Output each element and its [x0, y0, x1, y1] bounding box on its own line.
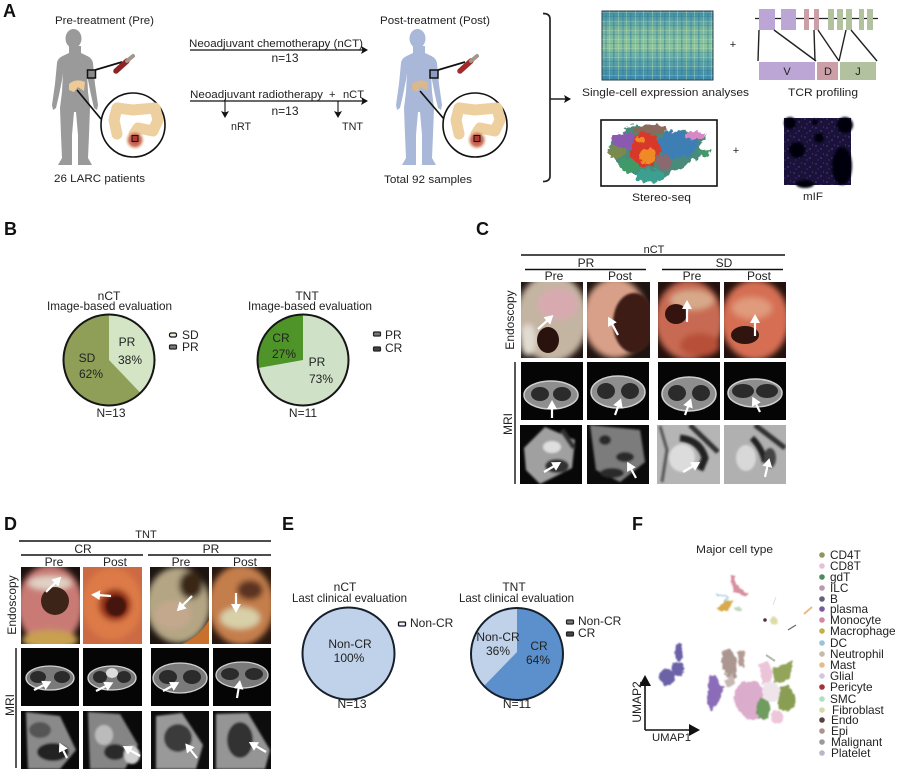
pie chart: TNT image-based evaluation: 73%	[309, 372, 333, 386]
photo: endoscopy SD Pre	[658, 282, 720, 358]
panel letter E: E	[282, 514, 294, 534]
label: total 92 samples: Total 92 samples	[384, 174, 473, 186]
column headers: TNT CR PR Pre Post: Pre	[172, 555, 191, 569]
legend: cell types: ILC	[830, 581, 849, 595]
panel letter A: A	[3, 1, 16, 21]
pie chart: TNT image-based evaluation: N=11	[289, 406, 317, 420]
pie chart: TNT last clinical evaluation: Non-CR	[476, 630, 520, 644]
pie chart: nCT image-based evaluation: nCT	[98, 289, 121, 303]
arrow: neoadjuvant radiotherapy plus nCT with nRT and TNT branches: Neoadjuvant radiotherapy	[190, 89, 324, 101]
icon: blue human body with colon, biopsy and blood tube	[396, 29, 507, 165]
map: stereo-seq spatial clusters	[601, 120, 717, 186]
legend: cell types: gdT	[830, 570, 850, 584]
arrow: neoadjuvant chemotherapy: Neoadjuvant chemotherapy (nCT)	[189, 38, 363, 50]
plus sign: +	[733, 145, 739, 157]
pie chart: TNT last clinical evaluation: CR	[530, 639, 548, 653]
pie chart: nCT last clinical evaluation: 100%	[334, 651, 365, 665]
pie chart: TNT last clinical evaluation: 36%	[486, 644, 510, 658]
pie chart: nCT image-based evaluation	[47, 289, 172, 420]
label: single-cell expression analyses: Single-cell expression analyses	[582, 87, 750, 99]
photo: endoscopy PR Pre	[521, 282, 583, 358]
panel C: nCT imaging	[476, 219, 789, 484]
bracket with arrow to analyses	[543, 14, 570, 182]
pie chart: nCT last clinical evaluation: N=13	[337, 697, 367, 711]
UMAP axes: UMAP1	[652, 732, 691, 744]
photo: endoscopy PR Pre	[146, 567, 210, 644]
legend: Non-CR and CR: Non-CR	[578, 614, 622, 628]
diagram: TCR V D J segments: D	[824, 66, 832, 78]
legend: PR and CR: CR	[385, 341, 403, 355]
column headers: nCT PR SD Pre Post: Post	[747, 269, 772, 283]
legend: SD and PR: SD	[182, 328, 199, 342]
heading: pre-treatment: Pre-treatment (Pre)	[55, 15, 154, 27]
legend: cell types: Endo	[831, 713, 859, 727]
panel letter C: C	[476, 219, 489, 239]
legend: cell types: Neutrophil	[830, 647, 884, 661]
column headers: nCT PR SD Pre Post: SD	[716, 256, 733, 270]
image: multiplex immunofluorescence	[784, 117, 853, 188]
pie chart: TNT last clinical evaluation: N=11	[503, 697, 531, 711]
arrow: neoadjuvant radiotherapy plus nCT with nRT and TNT branches: nRT	[231, 121, 251, 133]
pie chart: TNT last clinical evaluation: 64%	[526, 653, 550, 667]
diagram: TCR V D J segments: J	[855, 66, 861, 78]
label: 26 LARC patients: 26 LARC patients	[54, 173, 146, 185]
photo: endoscopy CR Pre	[21, 567, 80, 644]
panel letter F: F	[632, 514, 643, 534]
arrow: neoadjuvant radiotherapy plus nCT with nRT and TNT branches	[190, 89, 367, 133]
legend: PR and CR	[374, 328, 403, 355]
legend: cell types	[819, 548, 896, 760]
pie chart: TNT last clinical evaluation: Last clinical evaluation	[459, 591, 574, 605]
legend: cell types: Fibroblast	[832, 703, 885, 717]
column headers: TNT CR PR Pre Post: Post	[103, 555, 128, 569]
pie chart: TNT last clinical evaluation	[459, 580, 574, 711]
panel E: last clinical evaluation pies	[282, 514, 622, 711]
column headers: TNT CR PR Pre Post: CR	[74, 542, 92, 556]
panel letter B: B	[4, 219, 17, 239]
column headers: nCT PR SD Pre Post: Pre	[683, 269, 702, 283]
row label: endoscopy: Endoscopy	[5, 575, 19, 635]
legend: SD and PR: PR	[182, 340, 199, 354]
legend: cell types: Platelet	[831, 746, 871, 760]
pie chart: TNT last clinical evaluation: TNT	[502, 580, 526, 594]
row label: MRI with rule: MRI	[3, 694, 17, 716]
panel B: image-based evaluation pies	[4, 219, 403, 420]
column headers: nCT PR SD Pre Post: nCT	[644, 244, 665, 256]
legend: cell types: CD4T	[830, 548, 861, 562]
pie chart: TNT image-based evaluation: 27%	[272, 347, 296, 361]
arrow: neoadjuvant chemotherapy: n=13	[271, 51, 299, 65]
pie chart: nCT last clinical evaluation	[292, 580, 407, 711]
heading: post-treatment: Post-treatment (Post)	[380, 15, 490, 27]
arrow: neoadjuvant radiotherapy plus nCT with nRT and TNT branches: +	[329, 89, 335, 101]
label: stereo-seq: Stereo-seq	[632, 192, 691, 204]
column headers: TNT CR PR Pre Post: Post	[233, 555, 258, 569]
legend: Non-CR and CR	[566, 614, 622, 640]
heatmap: single-cell expression	[602, 11, 713, 80]
legend: cell types: plasma	[830, 602, 868, 616]
panel F: UMAP of major cell types	[630, 514, 896, 760]
legend: cell types: Monocyte	[830, 613, 882, 627]
legend: cell types: SMC	[830, 692, 857, 706]
legend: cell types: Epi	[831, 724, 848, 738]
legend: cell types: Malignant	[831, 735, 883, 749]
legend: Non-CR and CR: CR	[578, 626, 596, 640]
MRI axial row, panel D	[21, 648, 271, 706]
column headers: nCT PR SD Pre Post: PR	[578, 256, 595, 270]
label: TCR profiling: TCR profiling	[788, 87, 858, 99]
UMAP scatter clusters	[659, 575, 812, 724]
pie chart: nCT last clinical evaluation: Last clinical evaluation	[292, 591, 407, 605]
legend: cell types: Glial	[830, 669, 854, 683]
label: mIF: mIF	[803, 191, 823, 203]
panel D: TNT imaging	[3, 514, 274, 769]
column headers: TNT CR PR Pre Post: Pre	[45, 555, 64, 569]
column headers: TNT CR PR Pre Post	[19, 529, 271, 569]
plus sign: +	[730, 39, 736, 51]
photo: endoscopy PR Post	[587, 282, 650, 358]
column headers: nCT PR SD Pre Post	[521, 244, 785, 283]
legend: cell types: B	[830, 592, 838, 606]
pie chart: nCT image-based evaluation: 38%	[118, 353, 142, 367]
pie chart: TNT image-based evaluation: TNT	[295, 289, 319, 303]
panel letter D: D	[4, 514, 17, 534]
legend: cell types: CD8T	[830, 559, 861, 573]
icon: grey human body with colon, biopsy and blood tube	[52, 29, 165, 165]
pie chart: TNT image-based evaluation: CR	[272, 331, 290, 345]
legend: PR and CR: PR	[385, 328, 402, 342]
photo: endoscopy PR Post	[212, 567, 271, 644]
legend: cell types: Macrophage	[830, 624, 896, 638]
arrow: neoadjuvant radiotherapy plus nCT with nRT and TNT branches: nCT	[343, 89, 364, 101]
pie chart: nCT image-based evaluation: 62%	[79, 367, 103, 381]
UMAP axes: UMAP2	[630, 681, 644, 723]
diagram: TCR V D J segments: V	[783, 66, 791, 78]
legend: cell types: Pericyte	[830, 680, 873, 694]
photo: endoscopy CR Post	[82, 567, 142, 644]
row label: MRI with rule	[3, 648, 17, 768]
arrow: neoadjuvant radiotherapy plus nCT with nRT and TNT branches: TNT	[342, 121, 363, 133]
pie chart: nCT image-based evaluation: SD	[79, 351, 96, 365]
legend: SD and PR	[170, 328, 199, 354]
MRI axial row, panel C	[521, 362, 786, 420]
pie chart: nCT image-based evaluation: Image-based evaluation	[47, 299, 172, 313]
pie chart: TNT image-based evaluation: Image-based evaluation	[248, 299, 372, 313]
UMAP axes	[630, 681, 692, 744]
legend: cell types: Mast	[830, 658, 856, 672]
arrow: neoadjuvant chemotherapy	[189, 38, 367, 65]
column headers: TNT CR PR Pre Post: TNT	[135, 529, 157, 541]
column headers: TNT CR PR Pre Post: PR	[203, 542, 220, 556]
row label: MRI with rule: MRI	[501, 413, 515, 435]
diagram: TCR V D J segments	[755, 9, 878, 80]
chart title: Major cell type	[696, 544, 773, 556]
column headers: nCT PR SD Pre Post: Post	[608, 269, 633, 283]
pie chart: nCT image-based evaluation: PR	[119, 335, 136, 349]
row label: MRI with rule	[501, 362, 515, 484]
pie chart: nCT image-based evaluation: N=13	[96, 406, 126, 420]
MRI sagittal row, panel C	[520, 425, 786, 484]
column headers: nCT PR SD Pre Post: Pre	[545, 269, 564, 283]
photo: endoscopy SD Post	[724, 282, 786, 358]
legend: cell types: DC	[830, 636, 848, 650]
pie chart: TNT image-based evaluation: PR	[309, 355, 326, 369]
pie chart: TNT image-based evaluation	[248, 289, 372, 420]
legend: Non-CR: Non-CR	[410, 616, 454, 630]
MRI sagittal row, panel D	[21, 711, 271, 769]
arrow: neoadjuvant radiotherapy plus nCT with nRT and TNT branches: n=13	[271, 104, 299, 118]
row label: endoscopy: Endoscopy	[503, 290, 517, 350]
panel A: study design	[3, 1, 878, 204]
pie chart: nCT last clinical evaluation: nCT	[334, 580, 357, 594]
pie chart: nCT last clinical evaluation: Non-CR	[328, 637, 372, 651]
